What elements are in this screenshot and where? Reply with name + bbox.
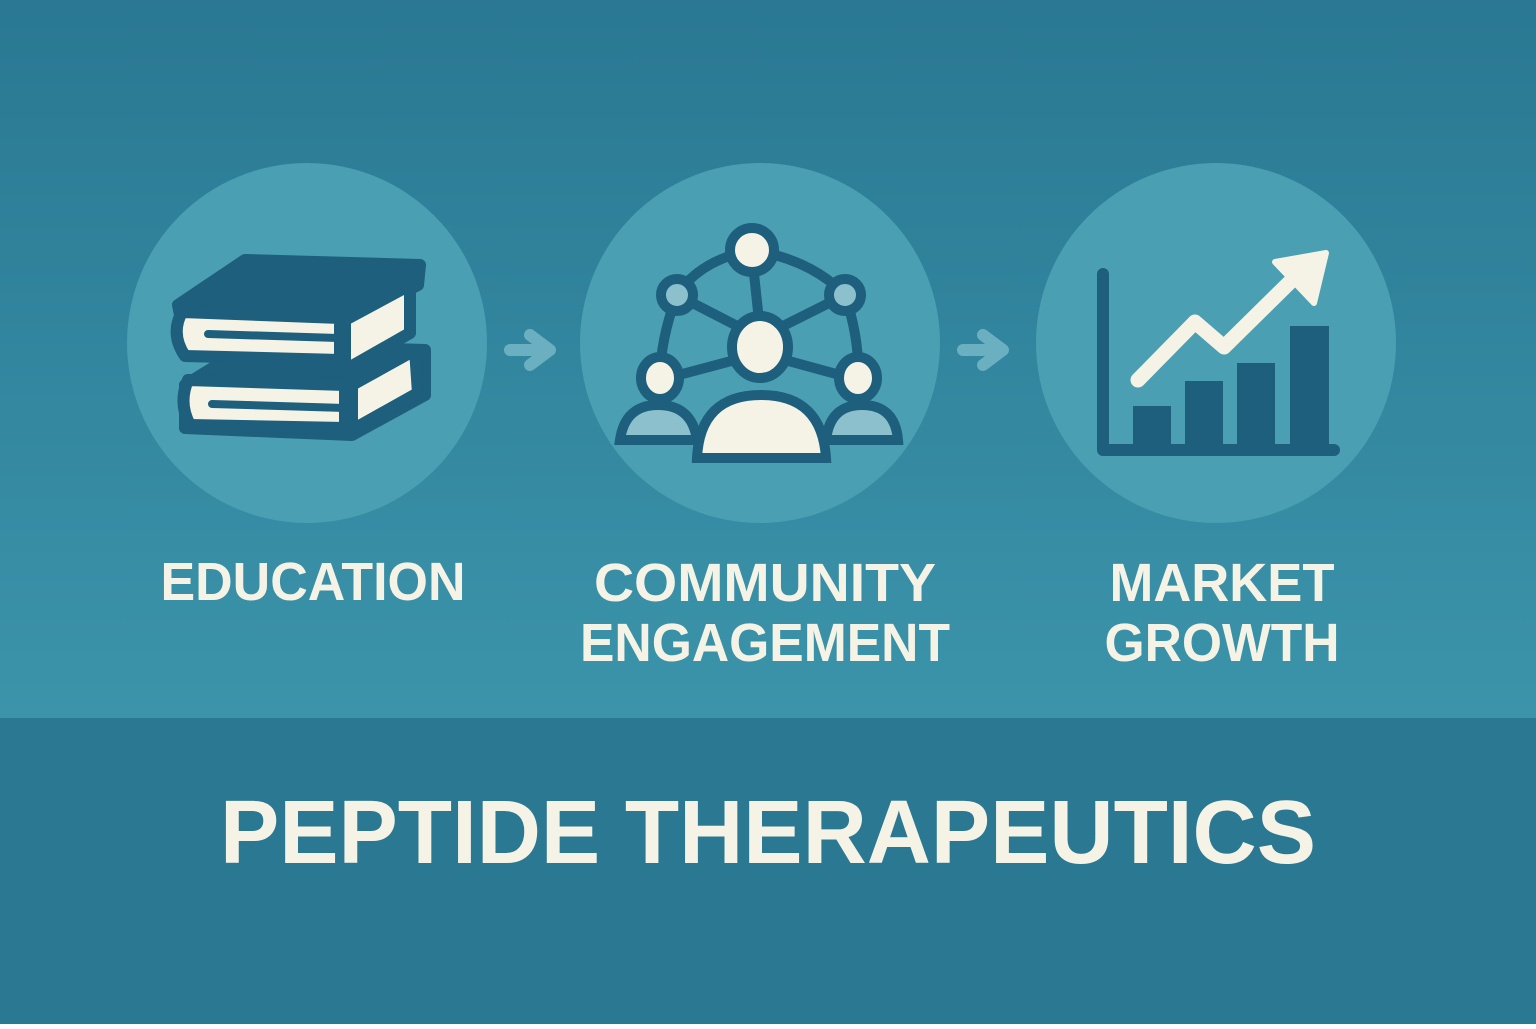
step: education [127,163,487,612]
step: market growth [1036,163,1396,673]
label: market growth: MARKET [1110,553,1335,613]
circle: community [580,163,940,523]
circle: market [1036,163,1396,523]
step: market growth: GROWTH [1104,613,1340,673]
step: community engagement [580,163,950,673]
label: education: EDUCATION [160,552,466,612]
bottom band [0,718,1536,1024]
step: community engagement: ENGAGEMENT [580,613,950,673]
icon: books [177,260,425,435]
label: community engagement: COMMUNITY [594,553,936,613]
arrow 1 [510,335,550,365]
circle: education [127,163,487,523]
icon: bar chart with arrow [1103,253,1334,450]
arrow 2 [963,335,1003,365]
title: PEPTIDE THERAPEUTICS [220,783,1316,883]
icon: network of people [660,250,858,380]
